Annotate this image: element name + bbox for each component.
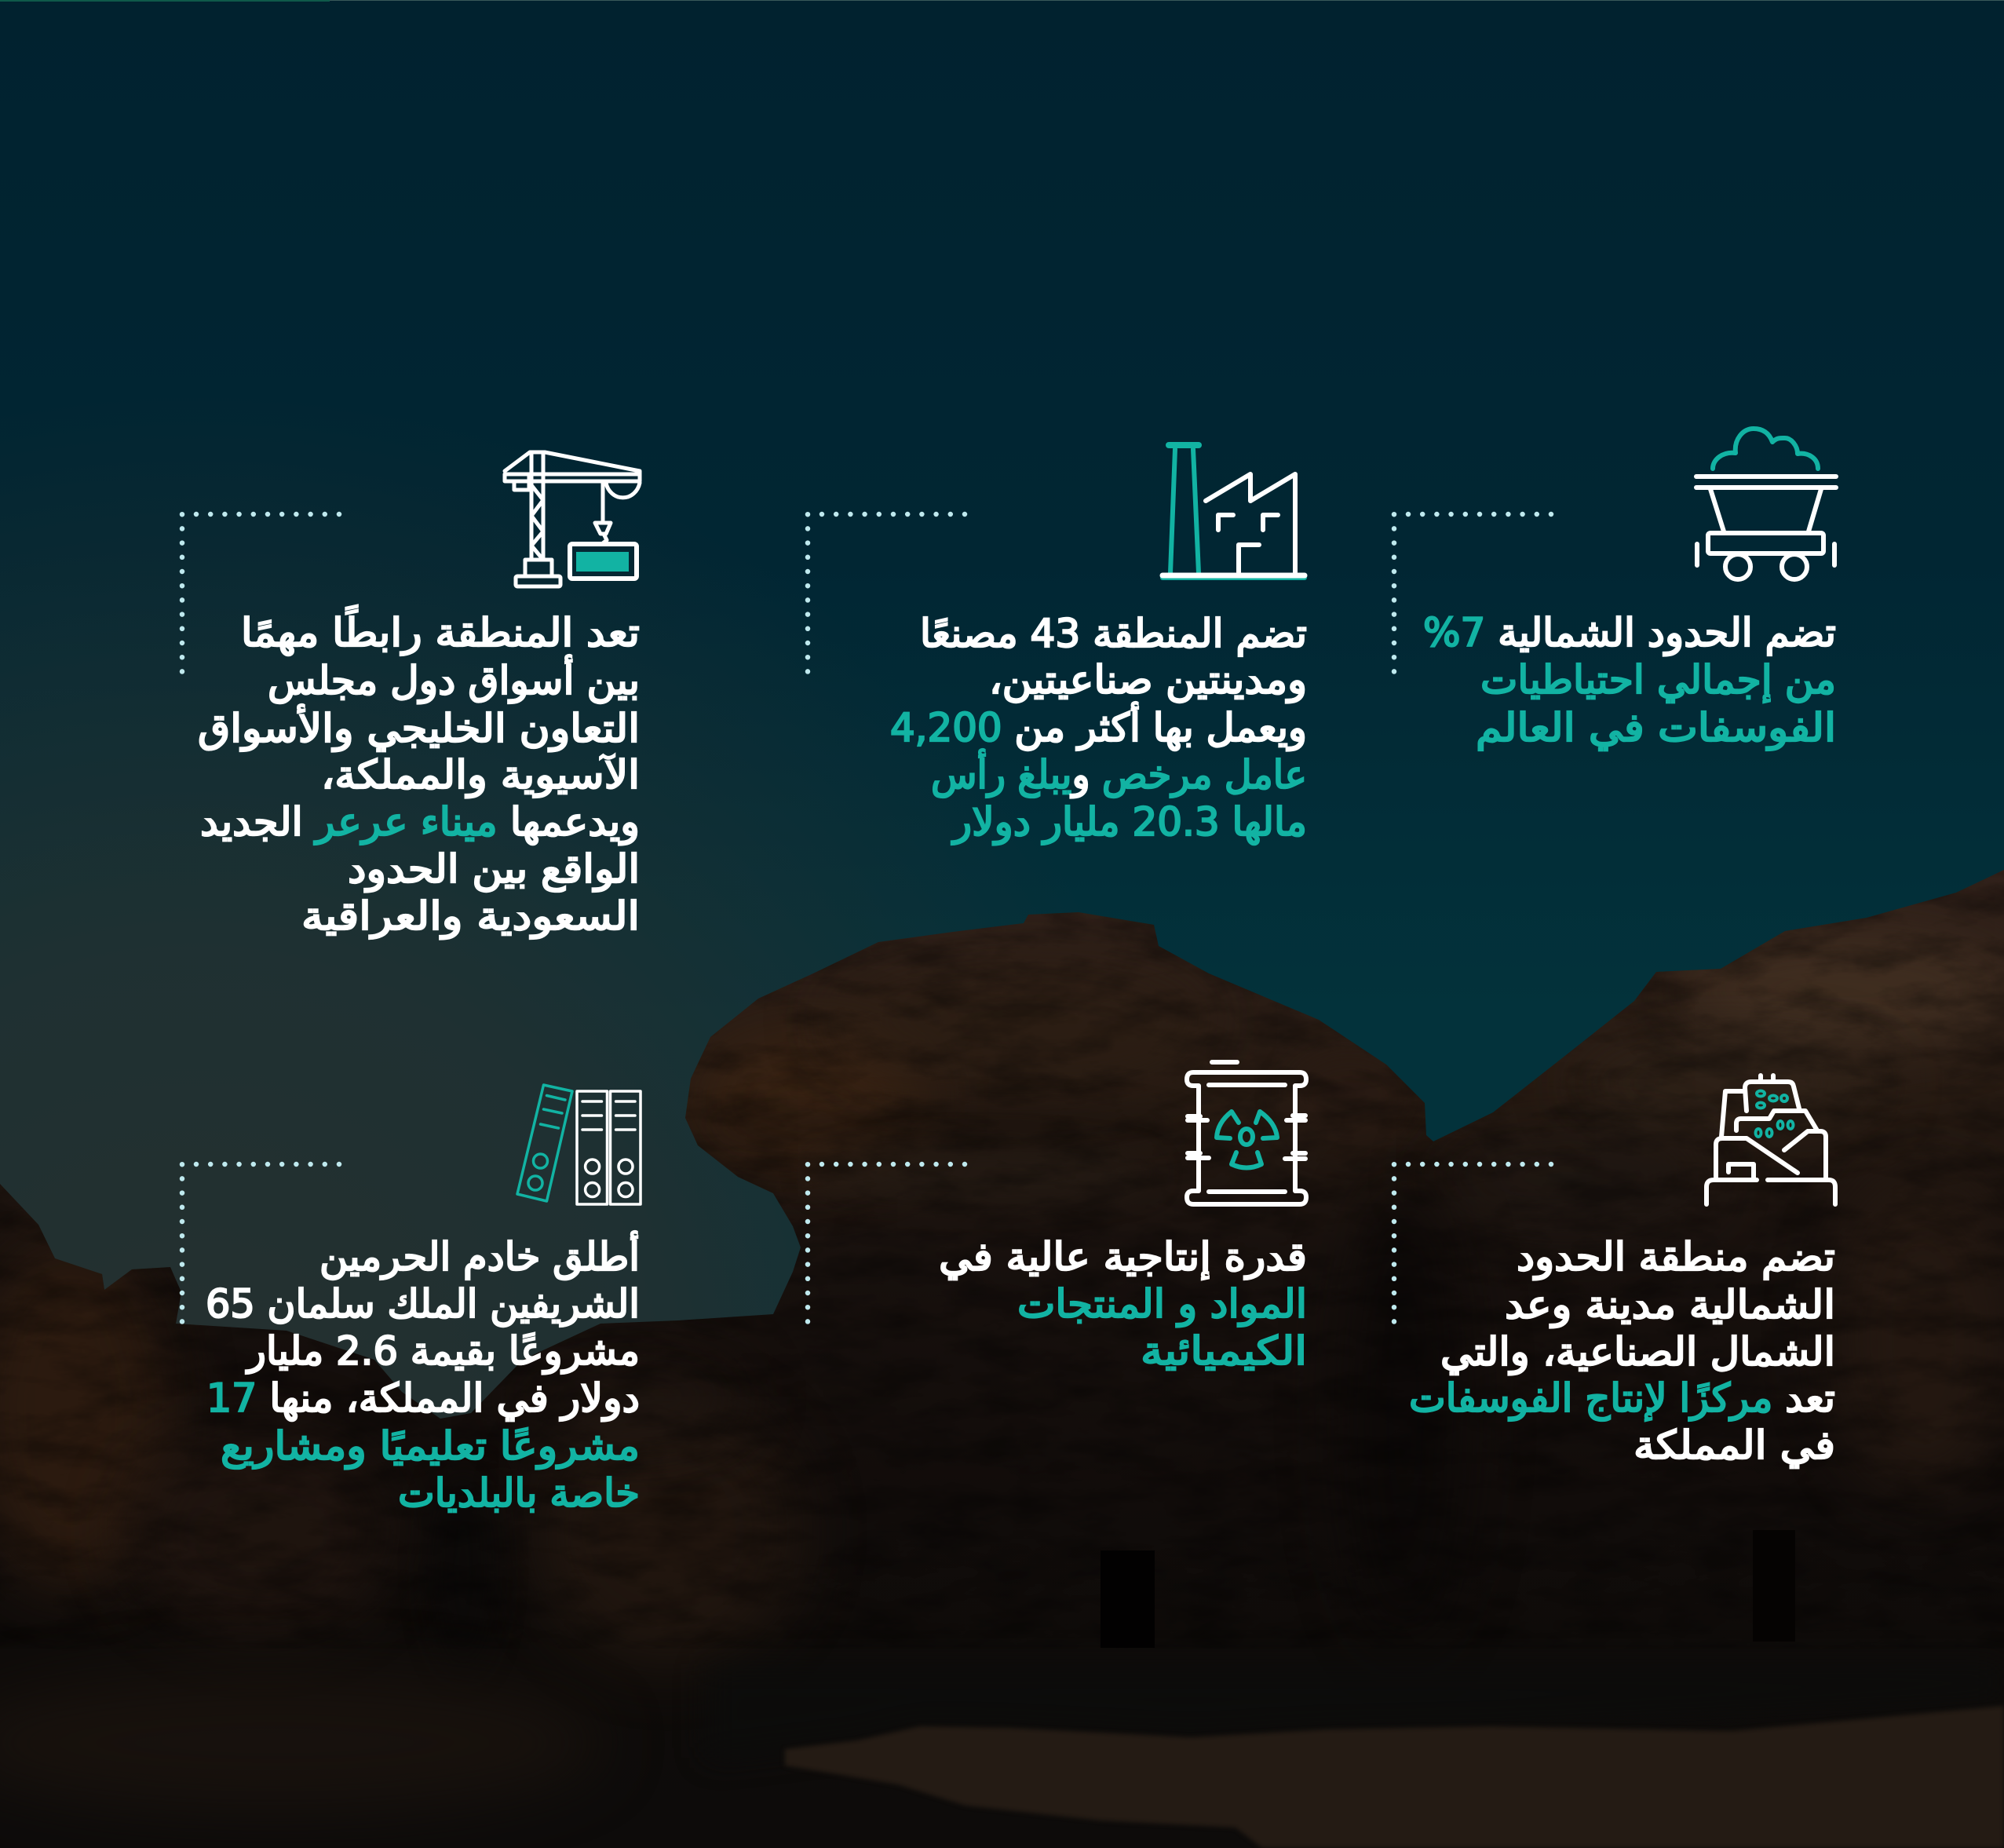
- text: Arar port: ويدعمها ميناء عرعر الجديد: [200, 799, 640, 845]
- icon: industrial plant: [1707, 1076, 1835, 1204]
- text: phosphate reserves: تضم الحدود الشمالية 7%: [1423, 610, 1836, 656]
- icon: binders: [517, 1085, 641, 1204]
- icon: factory: [1163, 445, 1305, 578]
- icon: crane: [505, 452, 640, 586]
- text: factories: مالها 20.3 مليار دولار: [951, 799, 1307, 845]
- text: royal projects: مشروعًا بقيمة 2.6 مليار: [245, 1328, 640, 1375]
- icon: mine cart: [1696, 429, 1836, 579]
- text: phosphate reserves: [1423, 610, 1836, 751]
- text: factories: ومدينتين صناعيتين،: [989, 657, 1307, 703]
- text: Arar port: الآسيوية والمملكة،: [321, 752, 640, 798]
- panel: factories: [808, 445, 1307, 845]
- text: Wa'ad Al Shamal: [1409, 1234, 1835, 1468]
- icon: chemical barrel: [1187, 1062, 1306, 1204]
- text: Wa'ad Al Shamal: تضم منطقة الحدود: [1517, 1234, 1835, 1280]
- text: Arar port: بين أسواق دول مجلس: [268, 655, 640, 704]
- text: chemicals: المواد و المنتجات: [1017, 1281, 1307, 1328]
- panel: Wa'ad Al Shamal: [1394, 1076, 1835, 1468]
- panel: Arar port: [182, 452, 640, 940]
- text: royal projects: مشروعًا تعليميًا ومشاريع: [221, 1423, 640, 1470]
- text: phosphate reserves: الفوسفات في العالم: [1476, 705, 1836, 751]
- text: Arar port: الواقع بين الحدود: [348, 846, 640, 893]
- dotted corner: [808, 1164, 965, 1327]
- text: Arar port: تعد المنطقة رابطًا مهمًا: [241, 604, 640, 656]
- text: factories: ويعمل بها أكثر من 4,200: [890, 702, 1307, 751]
- text: Wa'ad Al Shamal: الشمال الصناعية، والتي: [1440, 1329, 1835, 1375]
- text: royal projects: [206, 1231, 640, 1516]
- text: phosphate reserves: من إجمالي احتياطيات: [1480, 657, 1836, 703]
- dotted corner: [808, 514, 965, 677]
- text: Wa'ad Al Shamal: في المملكة: [1633, 1423, 1835, 1468]
- text: factories: تضم المنطقة 43 مصنعًا: [920, 611, 1307, 656]
- panel: phosphate reserves: [1394, 429, 1836, 751]
- text: royal projects: خاصة بالبلديات: [398, 1470, 640, 1516]
- dotted corner: [182, 1164, 339, 1327]
- text: royal projects: دولار في المملكة، منها 17: [206, 1375, 640, 1422]
- text: Wa'ad Al Shamal: تعد مركزًا لإنتاج الفوسفات: [1409, 1375, 1835, 1421]
- text: chemicals: [939, 1234, 1307, 1374]
- text: factories: عامل مرخص ويبلغ رأس: [931, 749, 1307, 798]
- panel: chemicals: [808, 1062, 1307, 1374]
- text: chemicals: الكيميائية: [1141, 1328, 1307, 1374]
- text: Arar port: السعودية والعراقية: [301, 893, 640, 940]
- panel: royal projects: [182, 1085, 641, 1516]
- text: royal projects: الشريفين الملك سلمان 65: [206, 1281, 640, 1327]
- text: Arar port: [198, 604, 640, 940]
- text: factories: [890, 611, 1307, 845]
- dotted corner: [1394, 514, 1551, 677]
- text: royal projects: أطلق خادم الحرمين: [319, 1231, 640, 1280]
- dotted corner: [1394, 1164, 1551, 1327]
- dotted corner: [182, 514, 339, 677]
- text: Arar port: التعاون الخليجي والأسواق: [198, 704, 640, 752]
- text: chemicals: قدرة إنتاجية عالية في: [939, 1234, 1307, 1280]
- background: sandstone rocks with carved tombs: [0, 864, 2004, 1848]
- text: Wa'ad Al Shamal: الشمالية مدينة وعد: [1505, 1282, 1835, 1328]
